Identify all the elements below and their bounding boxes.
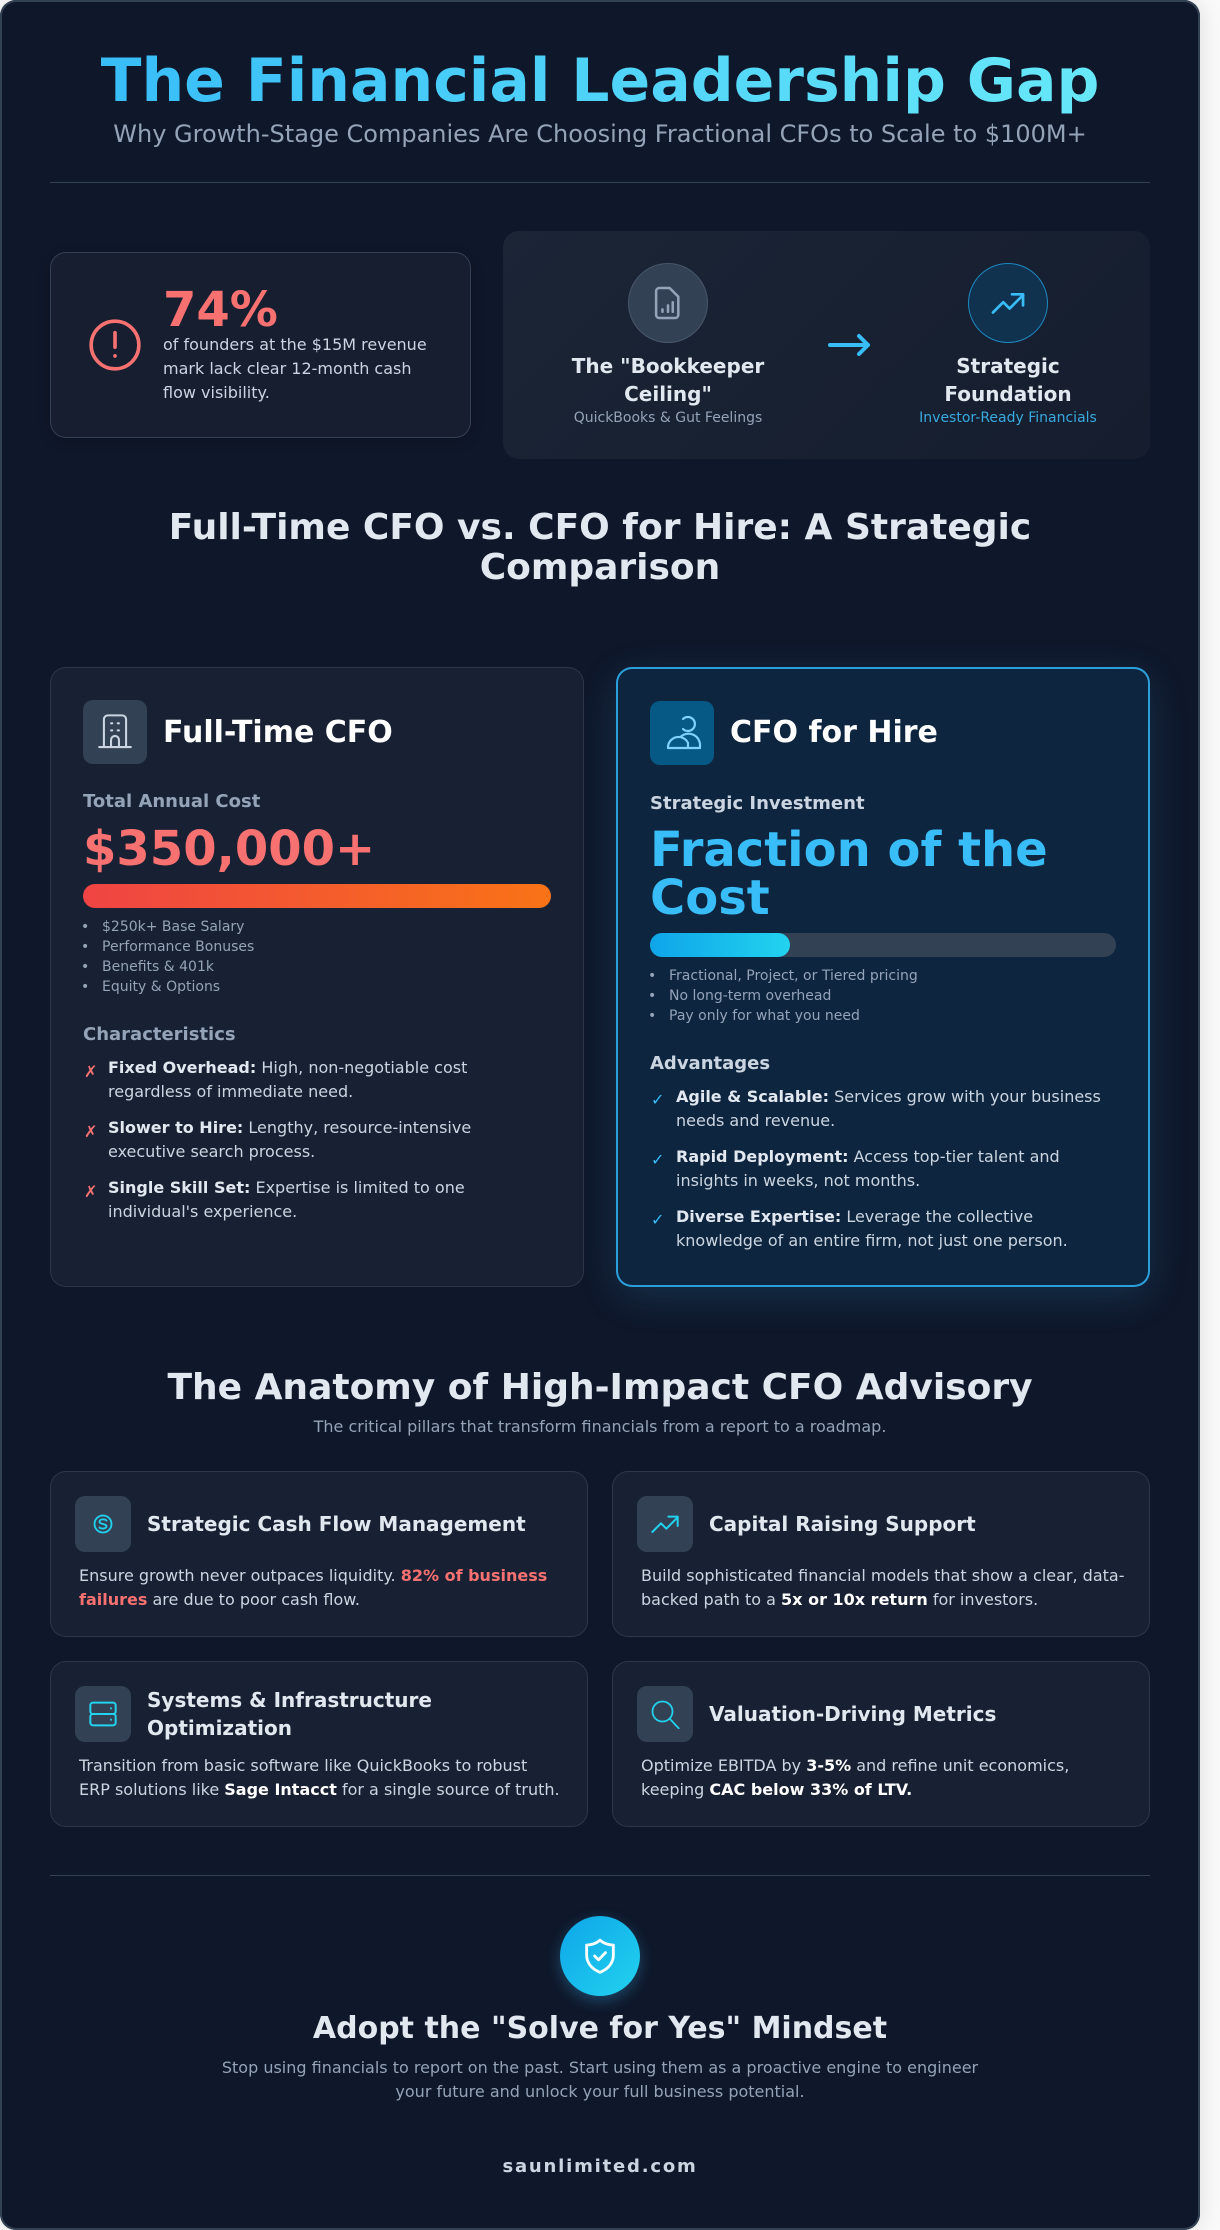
comparison heading: Full-Time CFO vs. CFO for Hire: A Strategic [169,507,1031,548]
pillar text [78,1756,560,1799]
panel: cash flow [50,1471,588,1637]
call to action text: Stop using financials to report on the past. Start using them as a proactive engine to engineer [222,2058,978,2077]
pillar text: Ensure growth never outpaces liquidity. 82% of business [79,1566,547,1585]
pillar text: backed path to a 5x or 10x return for investors. [641,1590,1038,1609]
characteristics list: individual's experience. [108,1202,297,1221]
cost value: $350,000+ [83,821,375,877]
advantages list: Agile & Scalable: Services grow with your business [676,1087,1101,1106]
pricing list: Fractional, Project, or Tiered pricing [669,968,918,984]
cost breakdown list: Benefits & 401k [102,959,214,975]
comparison heading [169,507,1031,588]
advantages list: Diverse Expertise: Leverage the collective [676,1207,1033,1226]
anatomy subheading: The critical pillars that transform financials from a report to a roadmap. [314,1417,886,1436]
pricing list: No long-term overhead [669,988,831,1004]
statistic description: flow visibility. [163,383,270,402]
characteristics list: Slower to Hire: Lengthy, resource-intensive [108,1118,471,1137]
before label: The "Bookkeeper [572,354,764,378]
advantages heading: Advantages [650,1053,770,1074]
panel: capital raising [612,1471,1150,1637]
pricing list [650,968,918,1024]
investment label: Strategic Investment [650,793,865,814]
icon: trending up circle [968,263,1048,343]
panel: 74% statistic [50,252,471,438]
before caption: QuickBooks & Gut Feelings [574,410,762,426]
pillar title: Systems & Infrastructure [147,1688,432,1712]
characteristics list: Fixed Overhead: High, non-negotiable cost [108,1058,467,1077]
characteristics list: Single Skill Set: Expertise is limited to one [108,1178,465,1197]
title: The Financial Leadership Gap [101,46,1099,116]
panel: systems [50,1661,588,1827]
anatomy heading: The Anatomy of High-Impact CFO Advisory [167,1367,1033,1408]
cost bar [83,884,551,908]
card title: Full-Time CFO [163,715,393,750]
website footer: saunlimited.com [502,2156,698,2177]
characteristics list: executive search process. [108,1142,315,1161]
statistic description: mark lack clear 12-month cash [163,359,412,378]
cost breakdown list: Equity & Options [102,979,220,995]
pillar text: ERP solutions like Sage Intacct for a single source of truth. [79,1780,560,1799]
icon: document chart circle [628,263,708,343]
call to action text [222,2058,978,2101]
advantages list: Rapid Deployment: Access top-tier talent and [676,1147,1060,1166]
pillar text: Optimize EBITDA by 3-5% and refine unit economics, [641,1756,1069,1775]
icon: trending up [637,1496,693,1552]
pillar text [79,1566,547,1609]
advantages list: needs and revenue. [676,1111,835,1130]
statistic value: 74% [163,282,278,338]
advantages list [651,1087,1101,1250]
icon: people [650,701,714,765]
pillar title: Capital Raising Support [709,1512,976,1536]
arrow [828,334,870,356]
advantages list: ✓ [651,1150,664,1169]
icon: server [75,1686,131,1742]
advantages list: insights in weeks, not months. [676,1171,920,1190]
characteristics list [84,1058,471,1221]
cost breakdown list: $250k+ Base Salary [102,919,244,935]
characteristics list: ✗ [84,1182,97,1201]
bar fill [650,933,790,957]
call to action text: your future and unlock your full business potential. [395,2082,805,2101]
pillar text [641,1566,1124,1609]
comparison heading: Comparison [480,547,720,588]
subtitle: Why Growth-Stage Companies Are Choosing Fractional CFOs to Scale to $100M+ [113,120,1087,148]
call to action title: Adopt the "Solve for Yes" Mindset [313,2011,887,2046]
after label [944,354,1072,406]
investment value [650,822,1048,926]
after label: Strategic [956,354,1060,378]
panel: valuation [612,1661,1150,1827]
characteristics list: ✗ [84,1122,97,1141]
panel: bookkeeper to strategic transformation [503,231,1150,459]
investment value: Cost [650,870,770,926]
icon: shield check [560,1916,640,1996]
header [101,46,1099,148]
pillar title: Strategic Cash Flow Management [147,1512,526,1536]
pillar text: Build sophisticated financial models that show a clear, data- [641,1566,1124,1585]
icon: alert circle [89,319,141,371]
pillar title: Optimization [147,1716,292,1740]
pricing list: Pay only for what you need [669,1008,860,1024]
advantages list: ✓ [651,1210,664,1229]
panel: full-time CFO [50,667,584,1287]
cost breakdown list [83,919,254,995]
panel: CFO for hire [616,667,1150,1287]
after label: Foundation [944,382,1072,406]
investment value: Fraction of the [650,822,1048,878]
characteristics list: ✗ [84,1062,97,1081]
advantages list: ✓ [651,1090,664,1109]
before label [572,354,764,406]
cost label: Total Annual Cost [83,791,260,812]
investment bar [650,933,1116,957]
pillar text: Transition from basic software like QuickBooks to robust [79,1756,527,1775]
advantages list: knowledge of an entire firm, not just one person. [676,1231,1068,1250]
pillar title [147,1688,432,1740]
card title: CFO for Hire [730,715,938,750]
before label: Ceiling" [624,382,712,406]
icon: office building [83,700,147,764]
pillar text: keeping CAC below 33% of LTV. [641,1780,912,1799]
characteristics list: regardless of immediate need. [108,1082,353,1101]
icon: dollar circle [75,1496,131,1552]
cost breakdown list: Performance Bonuses [102,939,254,955]
icon: magnifier [637,1686,693,1742]
after caption: Investor-Ready Financials [919,410,1097,426]
pillar text [641,1756,1069,1799]
statistic description: of founders at the $15M revenue [163,335,427,354]
characteristics heading: Characteristics [83,1024,236,1045]
pillar title: Valuation-Driving Metrics [709,1702,996,1726]
statistic description [163,335,427,402]
pillar text: failures are due to poor cash flow. [79,1590,360,1609]
